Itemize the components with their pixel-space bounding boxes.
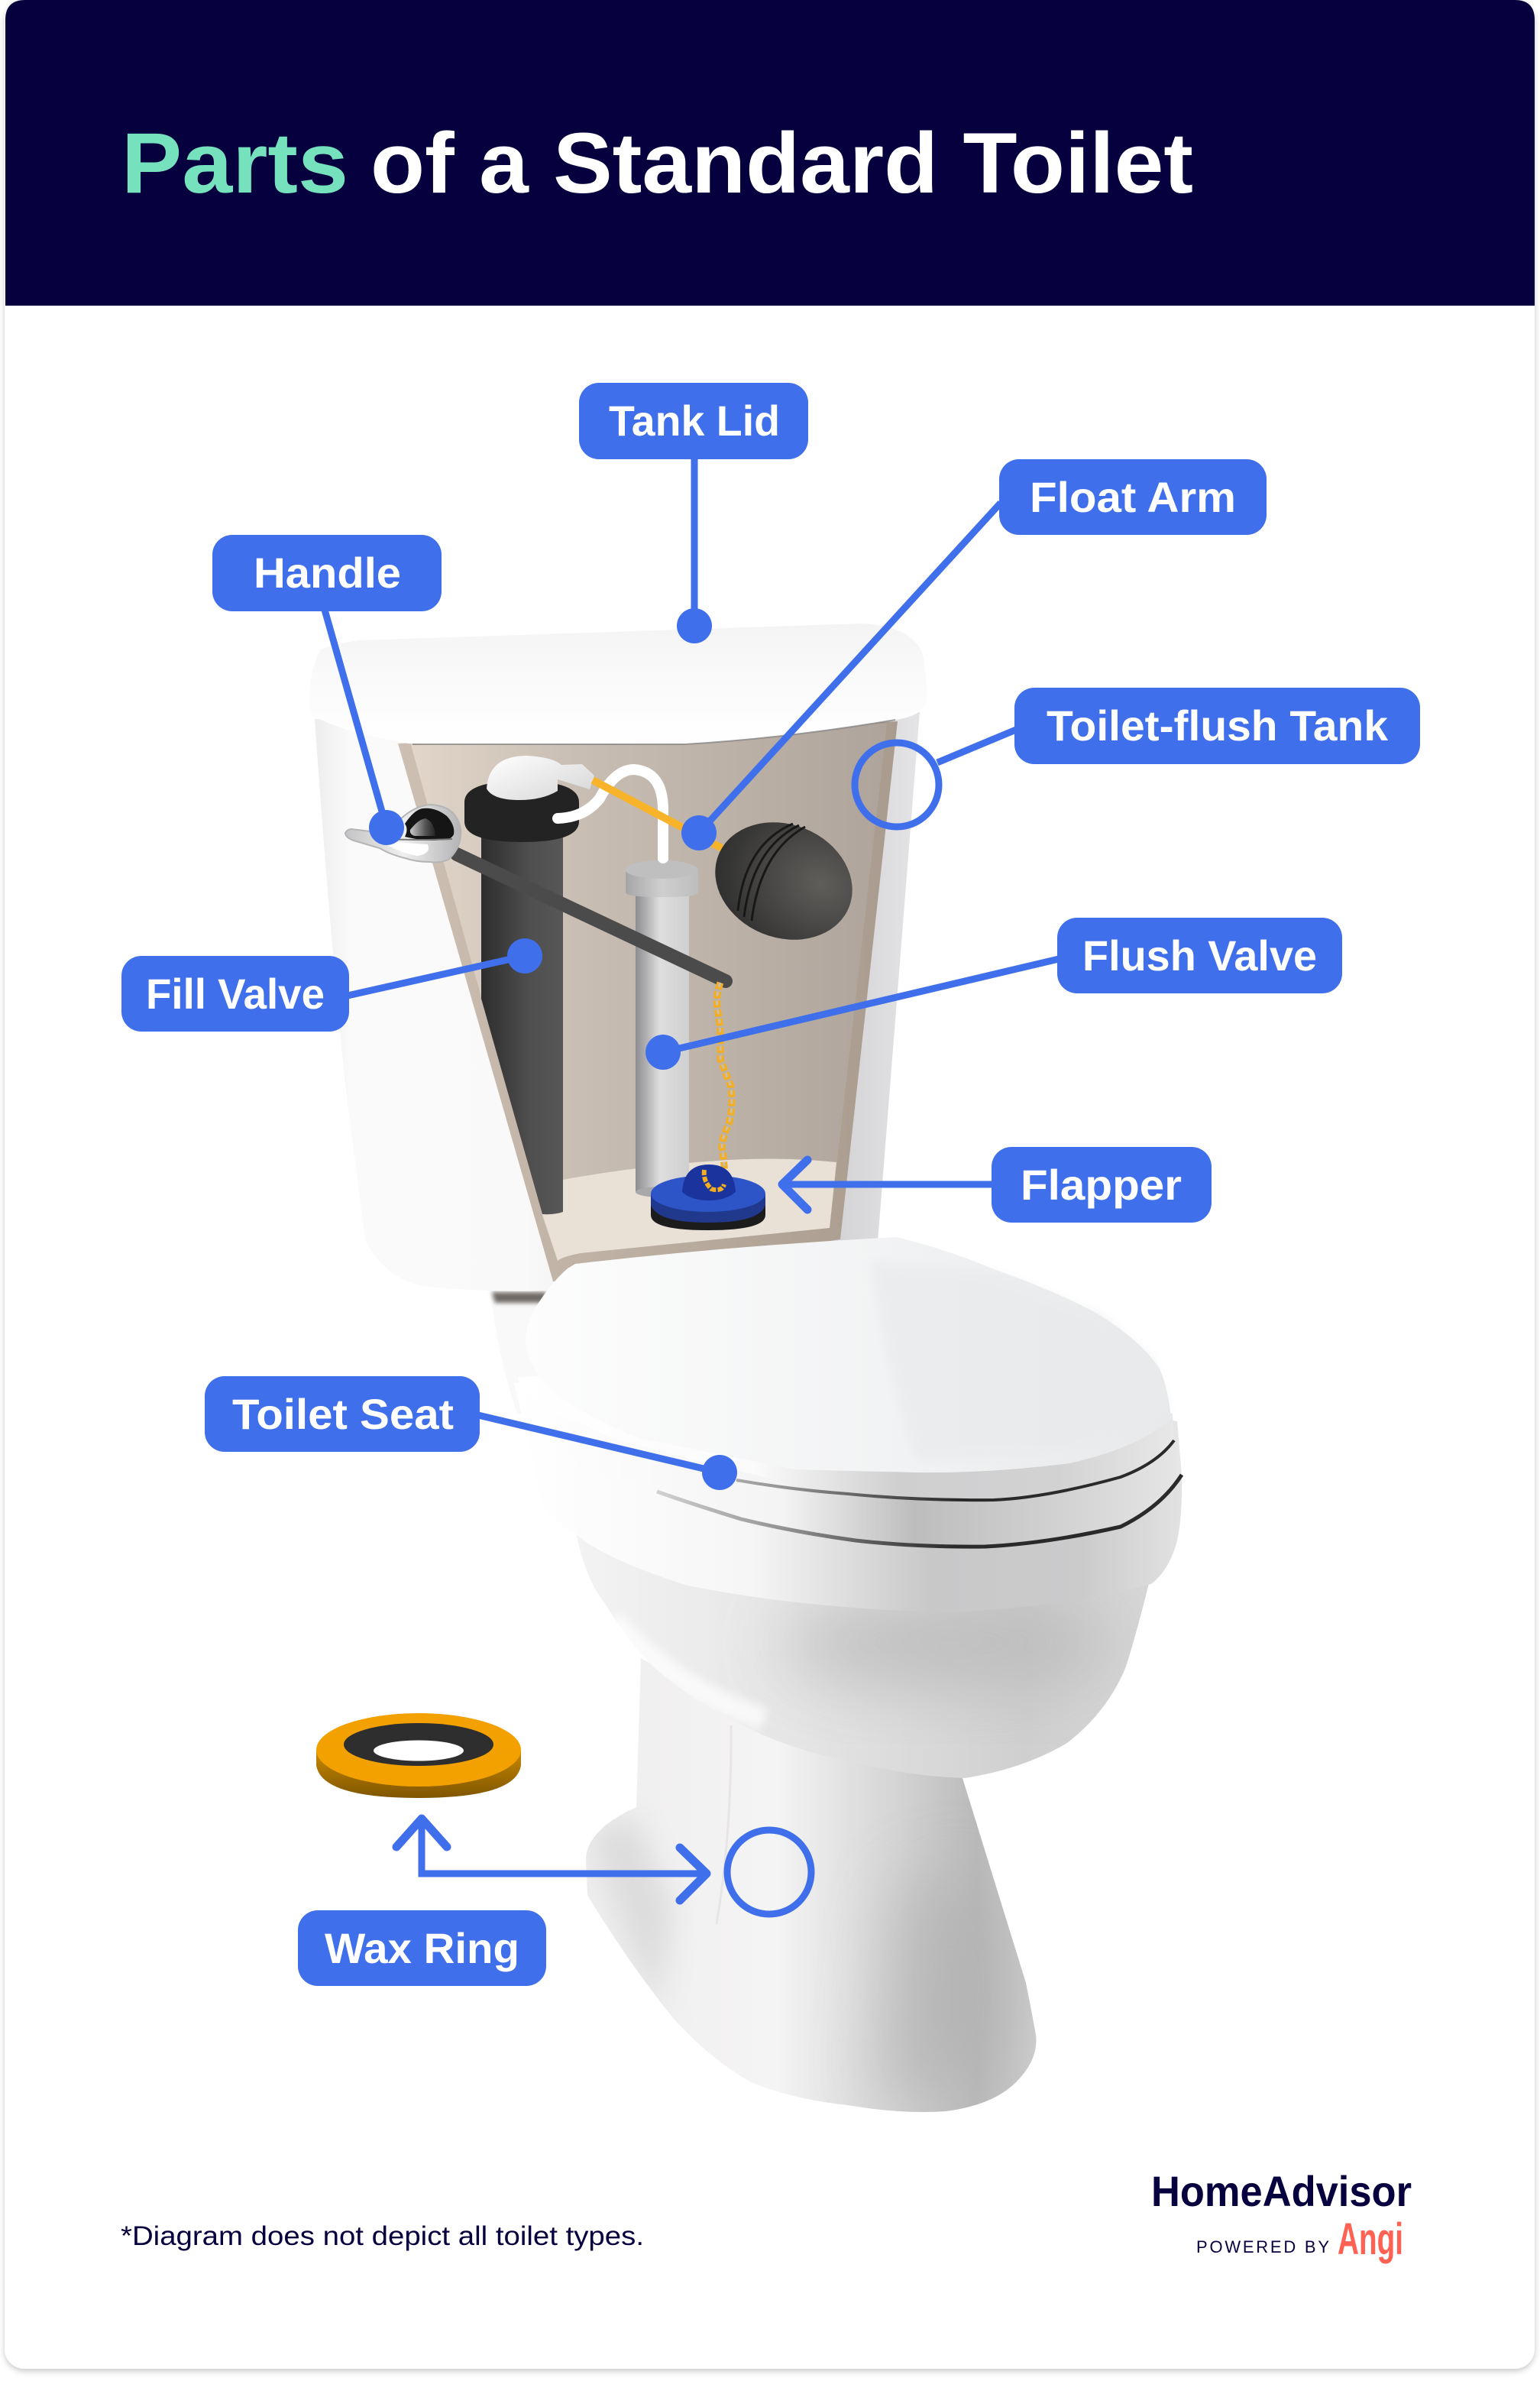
flapper bbox=[651, 1165, 765, 1230]
label: Flush Valve bbox=[1057, 918, 1342, 993]
bowl rim bbox=[517, 1375, 1182, 1612]
toilet illustration bbox=[309, 624, 1192, 2124]
label: Toilet Seat: Toilet Seat bbox=[232, 1390, 454, 1438]
label: Fill Valve: Fill Valve bbox=[146, 970, 325, 1018]
logo: HomeAdvisor bbox=[1151, 2167, 1412, 2215]
header band bbox=[5, 0, 1535, 306]
arrow: wax ring bbox=[396, 1819, 811, 1914]
tank floor bbox=[542, 1159, 836, 1261]
label: Handle bbox=[212, 535, 442, 611]
tank body bbox=[315, 712, 920, 1291]
label: Flapper bbox=[992, 1147, 1212, 1223]
chrome reflection bbox=[405, 808, 454, 841]
footnote: *Diagram does not depict all toilet types. bbox=[121, 2221, 644, 2251]
connector: float arm bbox=[681, 503, 1001, 850]
seat ring bbox=[514, 1360, 1182, 1547]
label: Flush Valve: Flush Valve bbox=[1082, 931, 1317, 980]
float ball bbox=[697, 802, 870, 960]
title: Parts bbox=[121, 115, 348, 211]
connector: toilet seat bbox=[478, 1415, 737, 1490]
label: Wax Ring bbox=[298, 1910, 546, 1986]
label: Toilet-flush Tank bbox=[1014, 688, 1420, 764]
tank lid bbox=[309, 624, 927, 744]
neck between tank and bowl bbox=[490, 1291, 565, 1414]
connector: tank lid bbox=[677, 459, 712, 643]
connector: fill valve bbox=[348, 938, 542, 996]
float dome bbox=[487, 756, 594, 800]
label: Wax Ring: Wax Ring bbox=[325, 1924, 519, 1972]
bowl bbox=[577, 1535, 1149, 1778]
label: Fill Valve bbox=[121, 956, 349, 1032]
label: Toilet-flush Tank: Toilet-flush Tank bbox=[1047, 701, 1389, 750]
title: of a Standard Toilet bbox=[370, 115, 1193, 211]
logo bbox=[1151, 2167, 1412, 2264]
label: Handle: Handle bbox=[254, 549, 401, 597]
pedestal bbox=[581, 1651, 1047, 2124]
fill valve bbox=[464, 781, 579, 1214]
arrow: flapper bbox=[782, 1160, 993, 1210]
white refill tube bbox=[558, 769, 663, 862]
tank wall bbox=[398, 721, 898, 1281]
cutaway bbox=[398, 721, 898, 1281]
label: Tank Lid: Tank Lid bbox=[609, 397, 780, 445]
wax ring bbox=[316, 1713, 521, 1798]
connector: flush valve bbox=[645, 959, 1059, 1070]
logo: POWERED BY bbox=[1196, 2237, 1329, 2256]
label: Flapper: Flapper bbox=[1021, 1161, 1182, 1209]
tank interior bbox=[411, 724, 887, 1261]
label: Float Arm: Float Arm bbox=[1030, 473, 1236, 521]
lift rod bbox=[457, 854, 726, 981]
label: Toilet Seat bbox=[205, 1376, 480, 1452]
float arm bbox=[593, 780, 722, 848]
fill valve cap bbox=[464, 781, 579, 842]
connector: handle bbox=[325, 610, 404, 845]
logo: Angi bbox=[1338, 2214, 1403, 2264]
connector: toilet-flush tank bbox=[855, 730, 1016, 827]
toilet seat lid bbox=[518, 1237, 1174, 1500]
label: Float Arm bbox=[999, 459, 1267, 535]
label: Tank Lid bbox=[579, 383, 808, 459]
handle bbox=[345, 805, 461, 863]
flapper chain bbox=[717, 983, 732, 1189]
flush valve bbox=[625, 833, 698, 1197]
